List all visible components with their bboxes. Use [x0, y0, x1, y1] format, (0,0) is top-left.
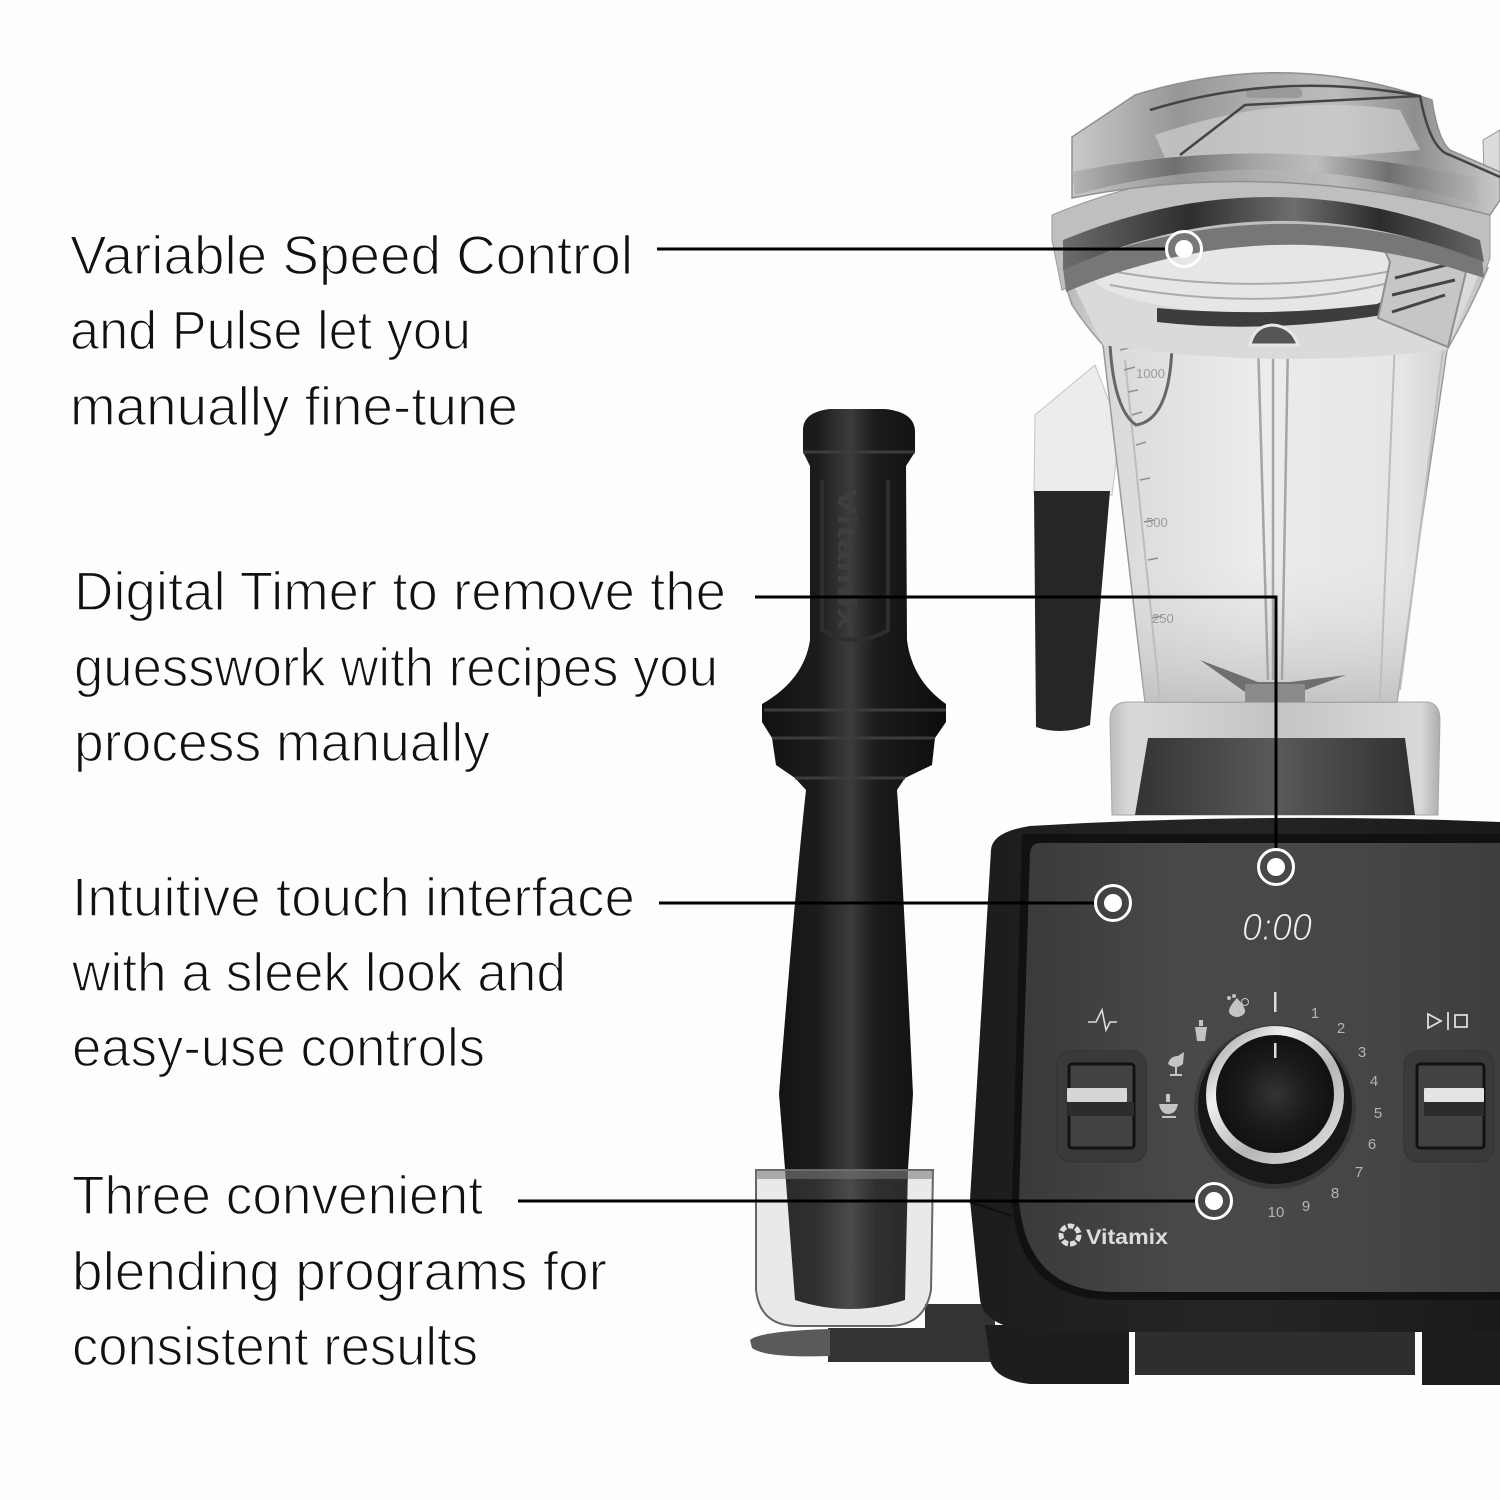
inner opening — [1090, 230, 1450, 314]
dial top tick — [1274, 992, 1276, 1012]
centre rib — [1258, 342, 1288, 680]
callout text: digital timer: process manually — [74, 711, 490, 773]
lower jar shading — [1130, 560, 1417, 702]
feet — [985, 1325, 1129, 1384]
measure labels — [1136, 366, 1174, 626]
right foot — [1422, 1325, 1500, 1385]
lid spout piece — [1483, 130, 1500, 178]
inner ring band — [1157, 292, 1400, 327]
control panel frame — [1012, 834, 1500, 1300]
measure labels: 500 — [1146, 515, 1168, 530]
collar ring — [1052, 170, 1490, 290]
speed numbers: 4 — [1370, 1073, 1378, 1090]
speed numbers: 6 — [1368, 1136, 1376, 1153]
tamper holder cup — [756, 1170, 933, 1326]
play stop icon — [1428, 1012, 1467, 1030]
measure labels: 1000 — [1136, 366, 1165, 381]
speed numbers: 3 — [1358, 1044, 1366, 1061]
control panel — [1019, 843, 1500, 1292]
tamper grip recess — [822, 480, 888, 640]
callout text: digital timer: guesswork with recipes you — [74, 636, 718, 698]
holder tray — [828, 1304, 995, 1362]
speed numbers: 5 — [1374, 1105, 1382, 1122]
right switch — [1404, 1051, 1494, 1162]
dial — [1194, 1025, 1356, 1189]
rib top — [1250, 325, 1298, 345]
lid plug highlights — [1155, 105, 1420, 170]
jar body — [1062, 225, 1488, 702]
marker: touch interface — [1096, 886, 1130, 920]
callout text: programs — [72, 1164, 607, 1377]
callout text: variable speed — [70, 224, 633, 437]
holder foot — [750, 1329, 830, 1356]
callout text: touch interface: with a sleek look and — [71, 941, 566, 1003]
callout text: programs: blending programs for — [72, 1240, 607, 1302]
handle dark grip — [1034, 491, 1110, 731]
timer display: 0:00 — [1242, 907, 1312, 949]
marker: digital timer — [1258, 850, 1294, 884]
tamper logo text: Vitamix — [832, 488, 862, 631]
jar inner rim — [1066, 228, 1484, 359]
side facets — [1125, 340, 1443, 700]
handle light upper — [1034, 365, 1120, 495]
callout text: programs: consistent results — [72, 1315, 478, 1377]
Vitamix logo — [1061, 1226, 1168, 1249]
measure labels: 250 — [1152, 611, 1174, 626]
speed numbers: 2 — [1337, 1020, 1345, 1037]
drive socket — [1135, 738, 1415, 815]
lid tab — [1246, 88, 1302, 98]
Vitamix logo: Vitamix — [1086, 1226, 1168, 1249]
speed numbers — [1268, 1005, 1382, 1221]
lower gray gasket band — [1063, 224, 1484, 292]
callout text: touch interface: Intuitive touch interface — [72, 866, 635, 928]
lid — [1072, 73, 1500, 215]
side seam — [970, 1202, 1012, 1216]
measuring marks — [1110, 340, 1172, 618]
leader line: programs — [518, 1200, 1196, 1202]
speed numbers: 8 — [1331, 1185, 1339, 1202]
callout text: programs: Three convenient — [72, 1164, 483, 1226]
callout text: digital timer — [74, 560, 726, 773]
callout text: touch interface — [71, 866, 635, 1078]
speed numbers: 9 — [1302, 1198, 1310, 1215]
lid dark band — [1072, 153, 1478, 205]
speed numbers: 1 — [1311, 1005, 1319, 1022]
pulse icon — [1088, 1010, 1117, 1030]
leader line: variable speed — [657, 248, 1166, 250]
blender jar — [1052, 73, 1500, 815]
marker: variable speed — [1166, 232, 1202, 266]
tamper accessory — [750, 409, 995, 1362]
hub — [1245, 684, 1305, 702]
black gasket — [1063, 197, 1484, 270]
callout text: digital timer: Digital Timer to remove the — [74, 560, 726, 622]
leader line: touch interface — [659, 902, 1095, 904]
blender base — [970, 818, 1500, 1385]
tamper body — [762, 409, 946, 1309]
speed numbers: 10 — [1268, 1204, 1284, 1221]
callout text: touch interface: easy-use controls — [72, 1016, 485, 1078]
cup rim — [756, 1170, 933, 1179]
speed numbers: 7 — [1355, 1164, 1363, 1181]
left switch — [1056, 1051, 1146, 1162]
base body — [970, 818, 1500, 1332]
callout text: variable speed: manually fine-tune — [70, 375, 518, 437]
blade — [1200, 660, 1346, 692]
jar collar base — [1110, 702, 1440, 815]
callout text: variable speed: and Pulse let you — [70, 299, 471, 361]
marker: programs — [1196, 1184, 1232, 1218]
pour spout inner — [1378, 240, 1466, 347]
recess between feet — [1135, 1325, 1415, 1375]
callout text: variable speed: Variable Speed Control — [70, 224, 633, 286]
inner rings — [1105, 265, 1420, 299]
leader line: digital timer — [755, 597, 1276, 850]
program icons — [1159, 994, 1248, 1118]
lid edge line — [1150, 86, 1500, 177]
tamper highlights — [764, 452, 946, 778]
spout dark lines — [1392, 262, 1458, 312]
jar handle — [1034, 365, 1120, 731]
